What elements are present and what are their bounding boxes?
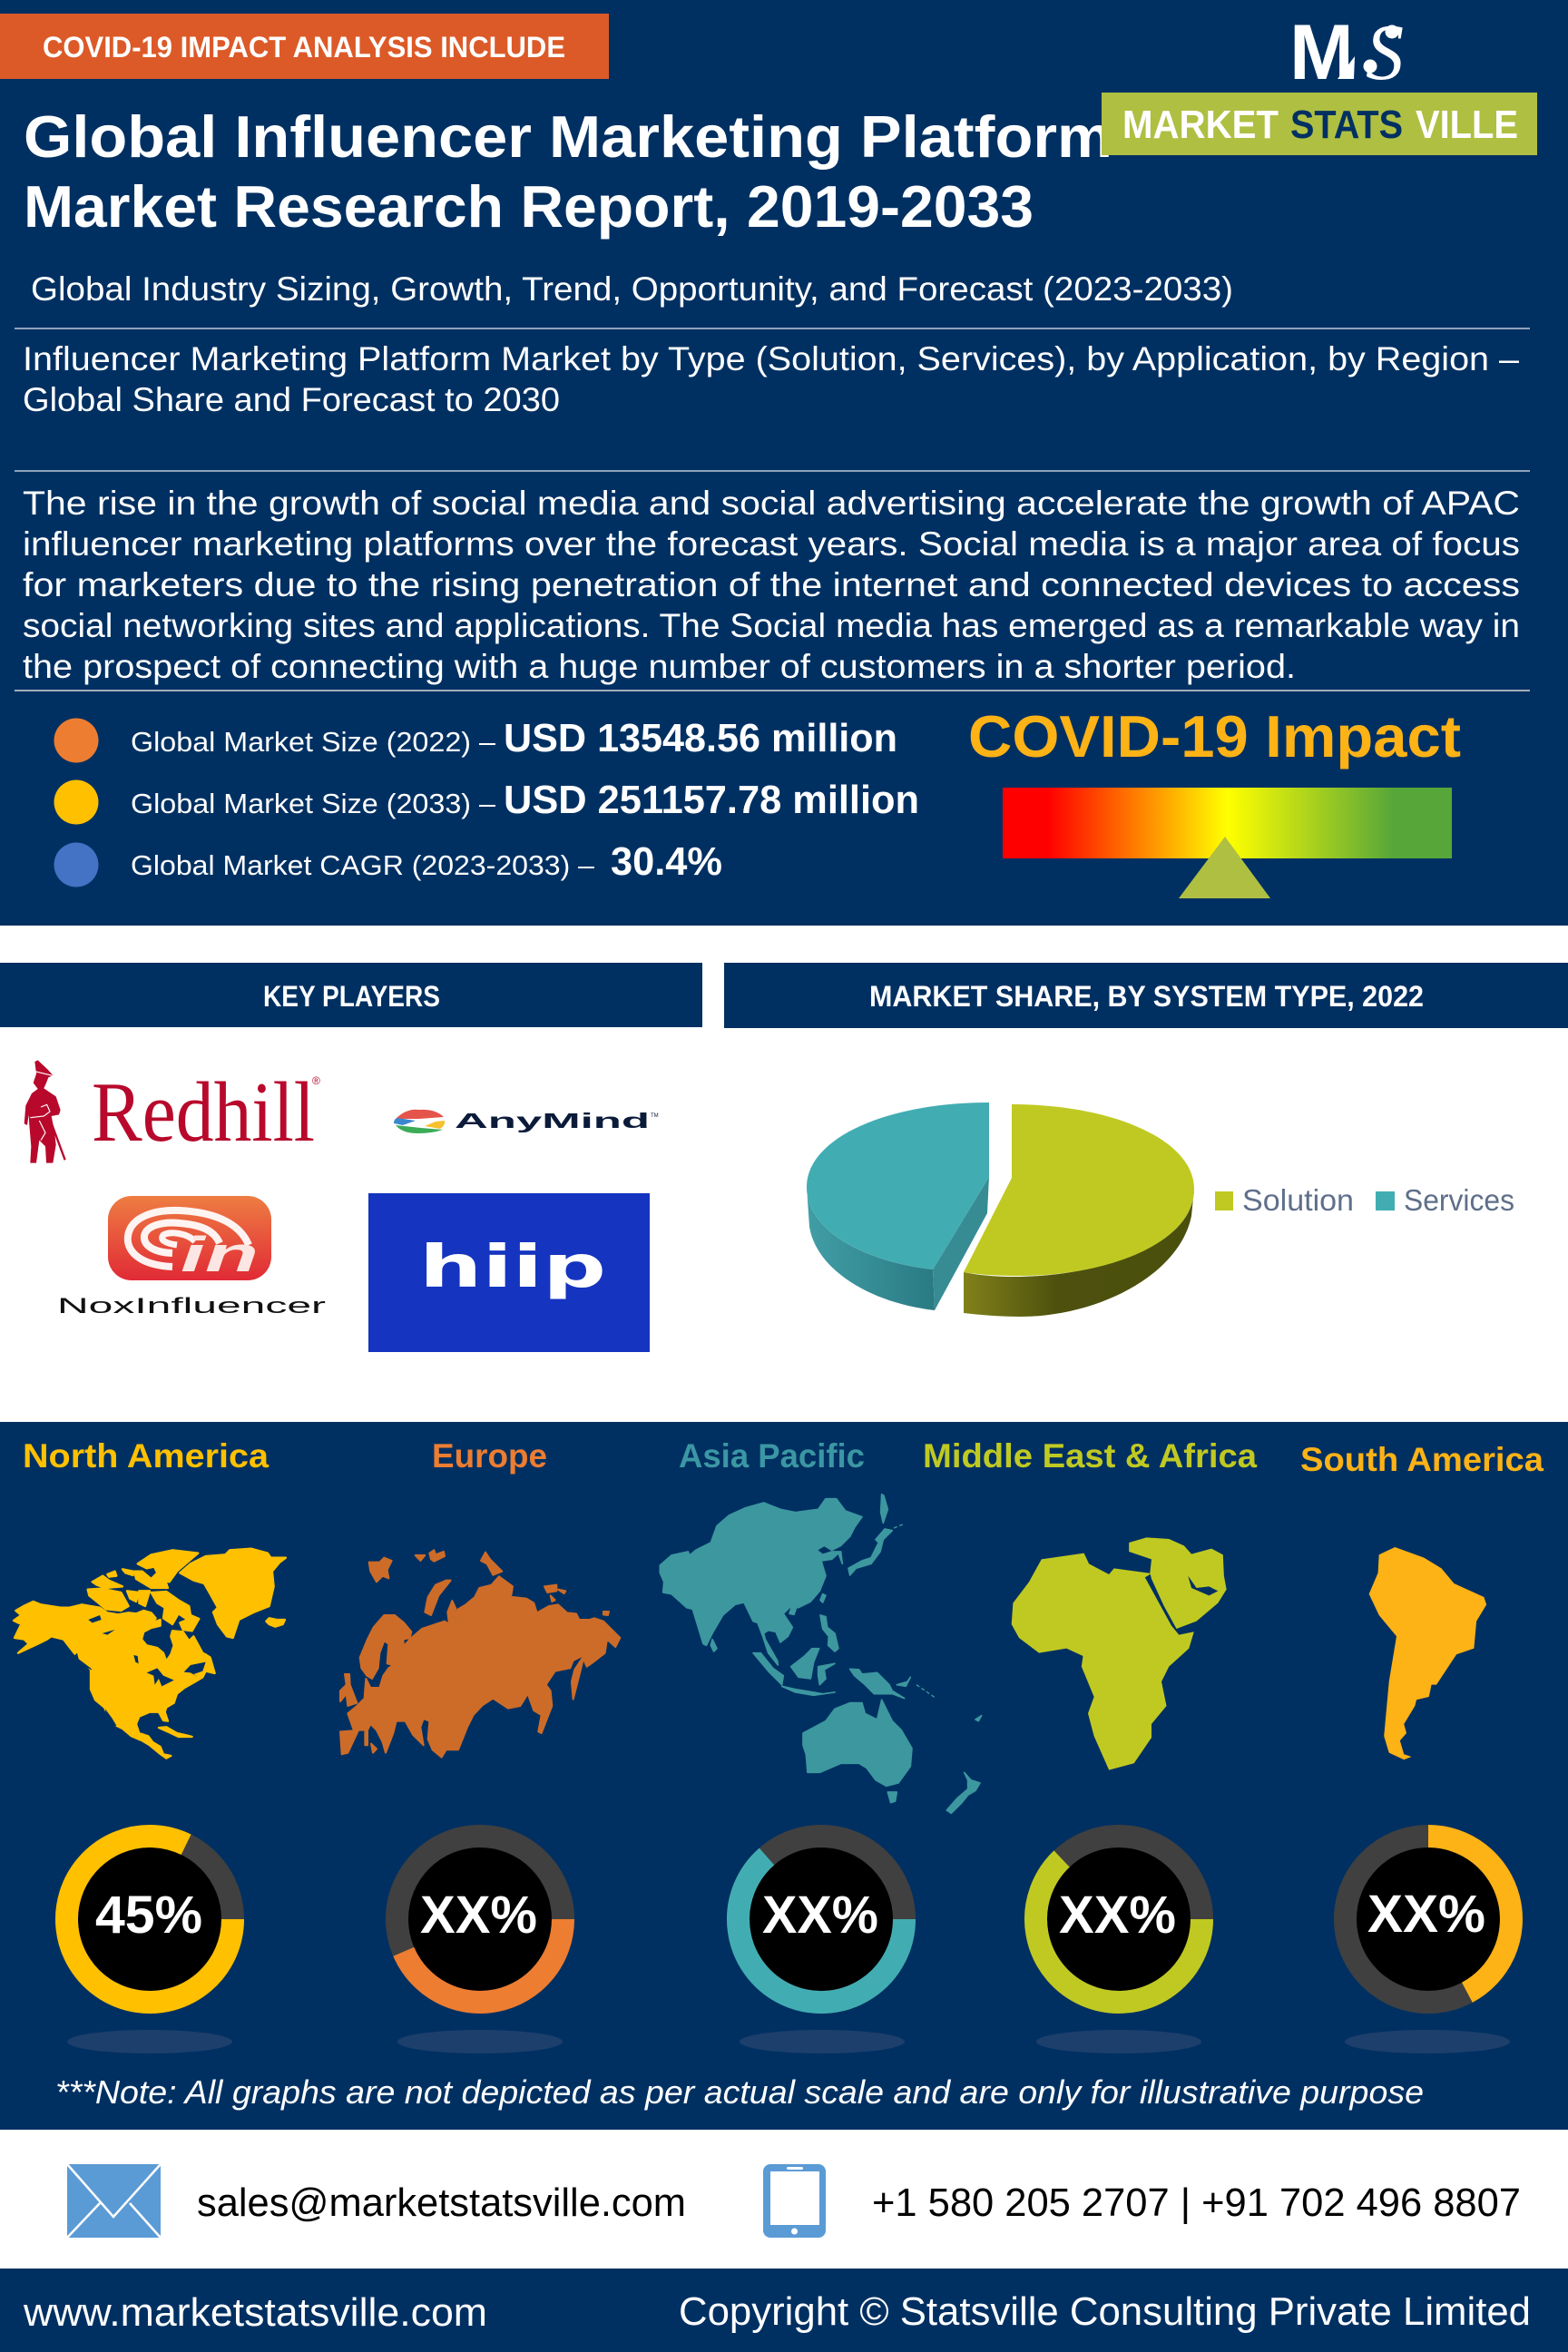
stat: market cagr	[54, 839, 722, 887]
map: europe and russia	[340, 1550, 620, 1758]
covid-19 impact heading: COVID-19 Impact	[968, 703, 1461, 769]
donut: south america: XX%	[1367, 1885, 1485, 1944]
title	[24, 103, 1112, 240]
chart legend	[1215, 1183, 1514, 1217]
map: asia pacific	[660, 1494, 982, 1813]
badge: covid-19 impact analysis: COVID-19 IMPACT ANALYSIS INCLUDE	[43, 31, 565, 64]
logo: anymind: TM	[651, 1113, 659, 1119]
description paragraph: influencer marketing platforms over the forecast years. Social media is a major area of focus	[23, 525, 1520, 563]
segmentation text: Influencer Marketing Platform Market by Type (Solution, Services), by Application, by Region –	[23, 340, 1519, 377]
region headings: Middle East & Africa	[923, 1437, 1257, 1475]
badge: covid-19 impact analysis	[0, 14, 609, 79]
chart legend: Solution	[1242, 1183, 1354, 1217]
market share header	[724, 963, 1568, 1028]
footer bar	[0, 2269, 1568, 2352]
stat: market size 2033	[54, 778, 919, 824]
donut: middle east and africa	[1036, 1837, 1201, 2002]
region headings: Asia Pacific	[679, 1437, 865, 1475]
donut: middle east and africa: XX%	[1059, 1886, 1176, 1945]
logo: market stats ville: S	[1366, 9, 1404, 97]
regions panel background	[0, 1422, 1568, 2130]
website: www.marketstatsville.com	[23, 2290, 487, 2335]
chart legend: Services	[1404, 1183, 1514, 1217]
description paragraph	[23, 485, 1520, 685]
logo: anymind	[394, 1109, 659, 1133]
stat: market size 2022	[54, 716, 897, 762]
copyright: Copyright © Statsville Consulting Private Limited	[679, 2289, 1531, 2334]
title: Global Influencer Marketing Platform	[24, 103, 1112, 170]
stat: market cagr: Global Market CAGR (2023-2033) –	[131, 849, 595, 881]
logo: hiip	[368, 1193, 650, 1352]
icon: phone	[763, 2164, 826, 2238]
email address: sales@marketstatsville.com	[197, 2180, 686, 2225]
stat: market size 2022: USD 13548.56 million	[504, 716, 897, 760]
key players header: KEY PLAYERS	[263, 980, 440, 1013]
description paragraph: for marketers due to the rising penetration of the internet and connected devices to access	[23, 566, 1520, 603]
segmentation text: Global Share and Forecast to 2030	[23, 381, 560, 418]
stat: market size 2033: Global Market Size (2033) –	[131, 788, 496, 819]
covid impact gauge	[1003, 788, 1452, 898]
logo: redhill: ®	[312, 1074, 320, 1087]
segmentation text	[23, 340, 1519, 418]
donut: north america 45%: 45%	[95, 1886, 202, 1945]
market share header: MARKET SHARE, BY SYSTEM TYPE, 2022	[869, 980, 1424, 1013]
description paragraph: social networking sites and applications. The Social media has emerged as a remarkable way in	[23, 607, 1520, 644]
logo: market stats ville: M	[1289, 9, 1355, 96]
donut shadows	[67, 2030, 1510, 2053]
map: south america	[1369, 1547, 1486, 1759]
icon: redhill figure	[24, 1060, 65, 1163]
logo: noxinfluencer	[57, 1196, 326, 1318]
donut: north america 45%	[67, 1837, 232, 2003]
logo: redhill: Redhill	[92, 1065, 315, 1160]
subtitle: Global Industry Sizing, Growth, Trend, Opportunity, and Forecast (2023-2033)	[31, 270, 1233, 308]
logo: market stats ville: MARKET	[1122, 103, 1279, 147]
stat: market size 2022: Global Market Size (2022) –	[131, 726, 496, 758]
region headings: South America	[1300, 1441, 1544, 1478]
donut: asia pacific	[739, 1837, 905, 2003]
donut: europe	[397, 1837, 563, 2002]
logo: hiip: hiip	[419, 1234, 606, 1301]
icon: email envelope	[67, 2164, 161, 2238]
phone numbers: +1 580 205 2707 | +91 702 496 8807	[872, 2180, 1521, 2225]
donut: asia pacific: XX%	[762, 1886, 878, 1945]
illustrative note: ***Note: All graphs are not depicted as per actual scale and are only for illustrative purpose	[55, 2073, 1424, 2111]
logo: noxinfluencer: in	[181, 1226, 259, 1282]
logo: anymind: AnyMind	[455, 1109, 650, 1132]
pie slice: services	[807, 1102, 989, 1310]
title: Market Research Report, 2019-2033	[24, 173, 1034, 240]
map: middle east and africa	[1012, 1537, 1227, 1770]
pie slice: solution	[964, 1104, 1194, 1317]
key players header	[0, 963, 702, 1027]
stat: market cagr: 30.4%	[611, 839, 722, 884]
donut: south america	[1345, 1837, 1512, 2002]
donut: europe: XX%	[420, 1886, 537, 1945]
map: north america	[14, 1549, 286, 1759]
description paragraph: The rise in the growth of social media and social advertising accelerate the growth of APAC	[23, 485, 1520, 522]
logo: market stats ville: STATS	[1290, 103, 1403, 147]
logo: market stats ville: VILLE	[1416, 103, 1518, 147]
header panel background	[0, 0, 1568, 926]
region headings: North America	[23, 1437, 269, 1475]
logo: market stats ville	[1102, 9, 1537, 155]
pie chart: market share	[807, 1102, 1514, 1317]
logo: noxinfluencer: NoxInfluencer	[57, 1294, 326, 1318]
region headings: Europe	[432, 1437, 547, 1475]
description paragraph: the prospect of connecting with a huge number of customers in a shorter period.	[23, 648, 1296, 685]
logo: redhill	[24, 1060, 320, 1163]
region headings	[23, 1437, 1544, 1478]
stat: market size 2033: USD 251157.78 million	[504, 778, 919, 822]
